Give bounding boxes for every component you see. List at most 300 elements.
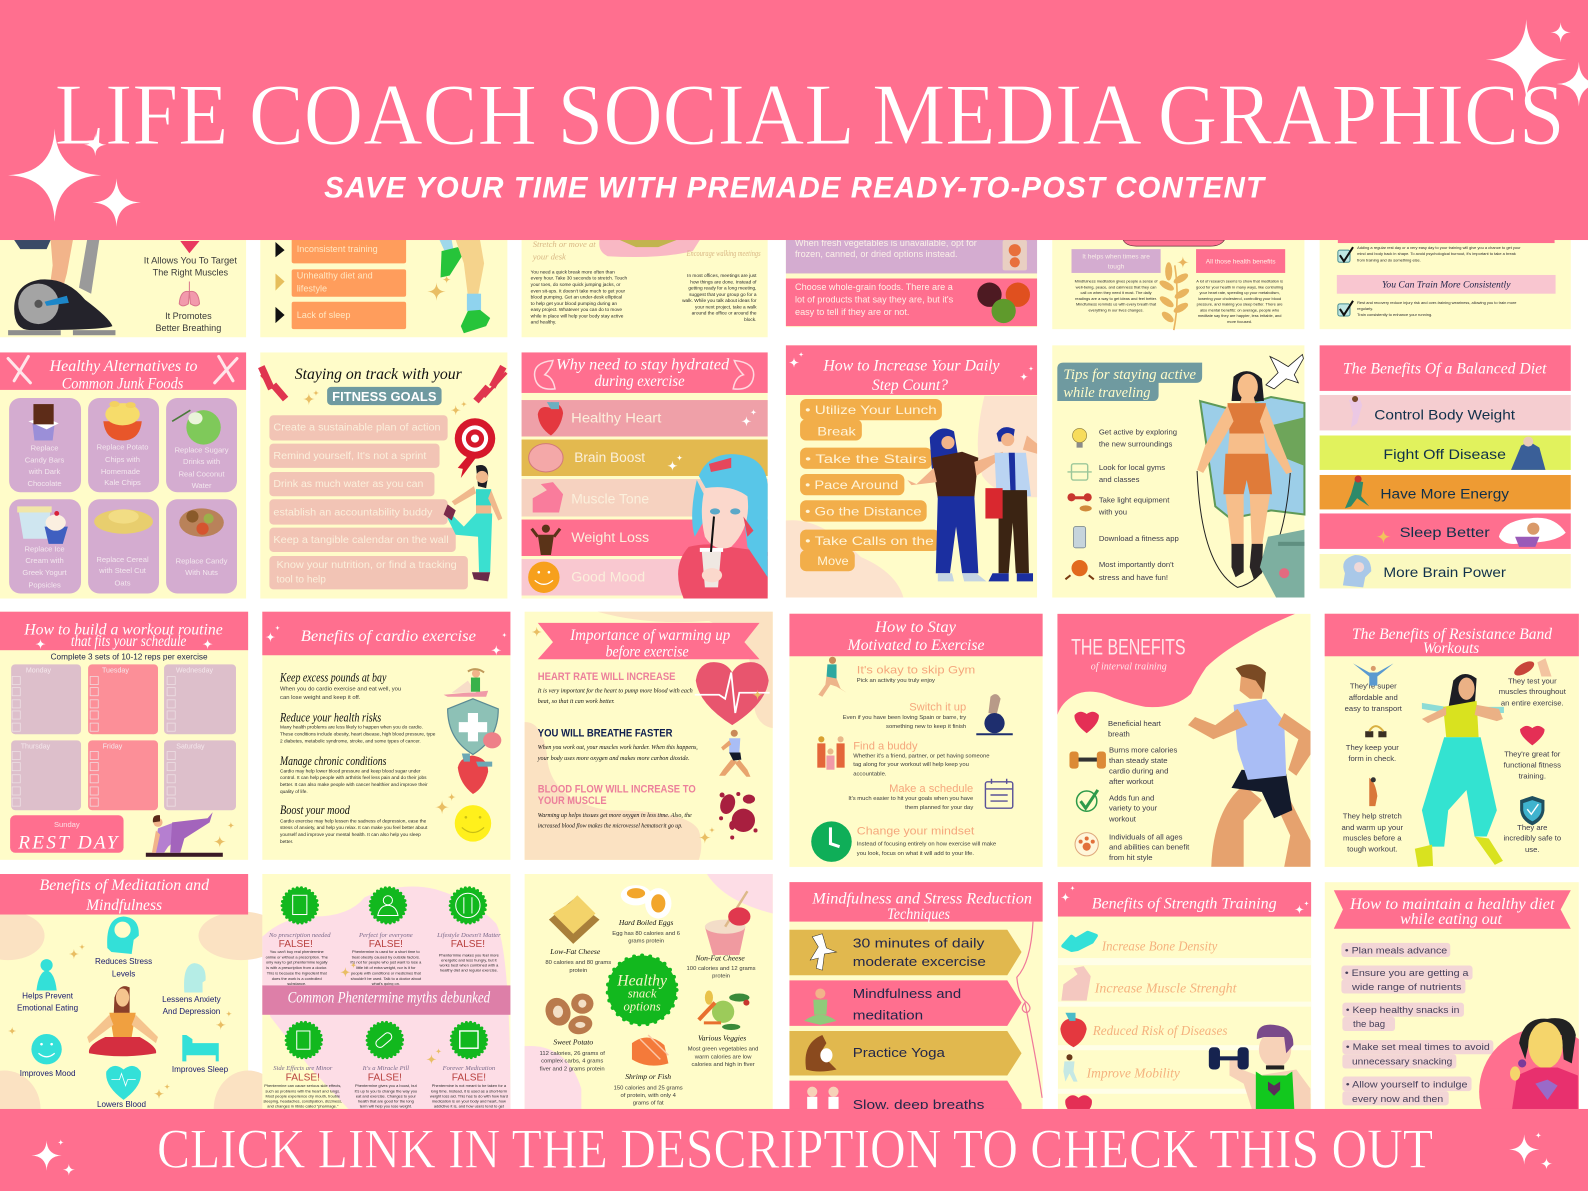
- text: left paragraph: to help get your blood pumping during an: [531, 301, 617, 307]
- myth: lifestyle: [436, 932, 501, 973]
- card labels: with Dark: [28, 467, 61, 476]
- header: workout routine: [0, 612, 248, 650]
- myth: forever medication: [430, 1065, 508, 1108]
- item: keep excess pounds: can lose weight and keep it off.: [280, 695, 361, 701]
- header: motivated: [789, 614, 1043, 656]
- list: eating tips: • Allow yourself to indulge: [1346, 1079, 1467, 1090]
- bottom banner: [0, 1109, 1588, 1191]
- icon: coconut: [172, 410, 221, 445]
- header: resistance band: Workouts: [1423, 639, 1479, 657]
- weekday cards: Saturday: [176, 742, 205, 750]
- item: switch it up: [843, 701, 966, 730]
- list: travel tips: [1098, 427, 1179, 582]
- bar: brain boost: [522, 440, 768, 476]
- item: improves sleep: [172, 1035, 229, 1074]
- item: keep excess pounds: [279, 671, 401, 701]
- myth: no prescription: This is because the ingredient that: [267, 970, 328, 975]
- panel: phentermine myths: [262, 874, 510, 1117]
- panel: fitness goals: [260, 352, 507, 599]
- bar: weight loss: Weight Loss: [571, 530, 649, 546]
- icon: stretching man: [1353, 663, 1394, 686]
- text: right paragraph: around the office or around the: [692, 311, 757, 317]
- text: left benefits: They help stretch: [1343, 812, 1402, 821]
- panel: healthy alternatives: [0, 352, 246, 599]
- icon: phone: [1074, 527, 1086, 548]
- bar: weight loss: [522, 520, 768, 556]
- item: emotional eating: [17, 959, 78, 1013]
- item: breathe faster: your body uses more oxygen and makes more carbon dioxide.: [537, 755, 690, 762]
- icon: woman in pink circle: [1479, 1018, 1579, 1109]
- text: right benefits: muscles throughout: [1499, 687, 1567, 696]
- myth: side effects: Most people experience dry mouth, trouble: [265, 1093, 341, 1098]
- header: balanced diet: [1320, 345, 1571, 391]
- item: improves mood: [20, 1034, 75, 1078]
- item labels: veggies: calories and high in fiver: [692, 1062, 755, 1068]
- icon: anime girl with drink: [678, 454, 768, 599]
- list: travel tips: Look for local gyms: [1099, 463, 1165, 472]
- card labels: Replace Candy: [176, 557, 228, 566]
- icon: heart with arms: [1520, 726, 1545, 745]
- list: travel tips: stress and have fun!: [1099, 573, 1168, 582]
- list: causes bars: lifestyle: [297, 284, 327, 294]
- item labels: potato: Sweet Potato: [553, 1038, 593, 1047]
- text: right benefits: use.: [1525, 845, 1540, 854]
- card labels: Oats: [115, 578, 131, 587]
- icon: sparkles: [532, 627, 763, 844]
- label box: health benefits: [1196, 249, 1285, 273]
- bar: more brain power: More Brain Power: [1383, 565, 1506, 581]
- card labels: Water: [192, 481, 212, 490]
- item: make a schedule: Make a schedule: [889, 783, 973, 795]
- subtitle: sets: Complete 3 sets of 10-12 reps per exercise: [51, 651, 208, 661]
- text: left benefits: affordable and: [1349, 693, 1398, 702]
- item labels: yogurt: [687, 954, 756, 980]
- myth: perfect for everyone: shouldn't be used. Talk to a doctor about: [351, 976, 422, 981]
- card labels: with Steel Cut: [98, 566, 147, 575]
- icon: shield: [448, 699, 501, 755]
- list: goal bars: establish an accountability buddy: [273, 507, 433, 518]
- item: change mindset: you look, focus on what it will add to your life.: [857, 851, 974, 857]
- text: left benefits: easy to transport: [1345, 704, 1403, 713]
- list: eating tips: unnecessary snacking: [1352, 1056, 1452, 1067]
- text: right paragraph: more focused.: [1227, 319, 1252, 324]
- item: blood flow: BLOOD FLOW WILL INCREASE TO: [538, 784, 696, 796]
- text: left paragraph: blood pumping. Get an under-desk elliptical: [531, 295, 622, 301]
- item labels: veggies: Various Veggies: [698, 1034, 746, 1043]
- row separators: [1058, 958, 1311, 1094]
- myth: miracle pill: eat and exercise. Changes to your: [356, 1093, 417, 1098]
- arrow: mindfulness: Mindfulness and: [853, 986, 961, 1001]
- checklist item: rest day: mind and body back in shape. To avoid psychological burnout, it's important to take a break: [1357, 251, 1516, 256]
- icon: woman with band: [1415, 674, 1504, 867]
- list: benefits: Burns more calories: [1109, 746, 1177, 755]
- text: left paragraph: every hour. Take 30 seconds to stretch. Touch: [531, 276, 628, 282]
- item: better heart: [1065, 1095, 1092, 1119]
- header: strength: [1058, 882, 1311, 917]
- arrow: mindfulness: meditation: [853, 1008, 923, 1023]
- item: improves sleep: Improves Sleep: [172, 1065, 229, 1074]
- item: improve mobility: Improve Mobility: [1086, 1066, 1180, 1081]
- card labels: [22, 443, 229, 589]
- icon: woman with jump rope: [1197, 371, 1292, 587]
- text: right paragraph: pressure, and making you sleep better. There are: [1197, 302, 1283, 307]
- panel: hydration: [522, 352, 768, 599]
- text: left paragraph: and healthy.: [531, 320, 556, 326]
- item: emotional eating: Emotional Eating: [17, 1004, 78, 1013]
- item: make a schedule: [848, 783, 973, 811]
- myth: forever medication: Forever Medication: [442, 1065, 496, 1072]
- item labels: eggs: [612, 918, 680, 945]
- item: skip gym: It's okay to skip Gym: [857, 664, 975, 676]
- list: eating tips: wide range of nutrients: [1351, 982, 1462, 993]
- text: right paragraph: suggest that your group go for a: [689, 292, 757, 298]
- myth: no prescription: FALSE!: [279, 939, 313, 950]
- item: change mindset: Change your mindset: [857, 826, 975, 838]
- icon: sparkles: [435, 793, 456, 814]
- item: boost your mood: yourself and improve your mental health. It can also help you sleep: [280, 832, 421, 838]
- myth: side effects: FALSE!: [286, 1073, 320, 1084]
- item labels: fish: [614, 1072, 683, 1107]
- heading: the benefits: [1072, 639, 1185, 672]
- text: right paragraph: also mental benefits: on average, people who: [1200, 307, 1280, 312]
- text: right paragraph: walk. While you talk about ideas for: [682, 298, 757, 304]
- item labels: fish: of protein, with only 4: [620, 1093, 677, 1099]
- item: keep excess pounds: When you do cardio exercise and eat well, you: [280, 687, 401, 693]
- band: train consistently: You Can Train More Consistently: [1382, 280, 1511, 291]
- header: cardio: [262, 612, 510, 655]
- header: meditation: Mindfulness: [85, 896, 162, 914]
- bar: more brain power: [1320, 554, 1571, 588]
- list: benefits: than steady state: [1109, 756, 1168, 765]
- header: meditation: [0, 874, 248, 915]
- text: right benefits: They are: [1517, 823, 1547, 832]
- icon: smiley: [455, 805, 491, 842]
- icon: yoga figure: [146, 812, 223, 857]
- list: goal bars: Create a sustainable plan of action: [273, 422, 441, 433]
- list: travel tips: Most importantly don't: [1099, 560, 1175, 569]
- text: left paragraph: call on when they need it most. The daily: [1081, 290, 1152, 295]
- bar: good mood: [522, 559, 768, 596]
- item: reduce health risks: 2 diabetes, metabolic syndrome, stroke, and some types of cancer.: [280, 739, 421, 745]
- item labels: eggs: Hard Boiled Eggs: [618, 918, 673, 927]
- item: manage chronic conditions: quality of life.: [280, 789, 308, 795]
- panel: healthy food tips fragment: [786, 233, 1037, 327]
- icon: potato chips: [103, 401, 142, 441]
- text: right paragraph: [682, 273, 757, 323]
- icon: map: [1200, 397, 1304, 519]
- ribbon heading: eating out: How to maintain a healthy diet: [1349, 895, 1555, 913]
- item: bone density: Increase Bone Density: [1101, 938, 1217, 953]
- tip box: whole grain: easy to tell if they are or not.: [795, 307, 909, 317]
- item labels: fish: 150 calories and 25 grams: [614, 1085, 683, 1091]
- myth: perfect for everyone: It's not for people who just want to lose a: [350, 960, 422, 965]
- text: left paragraph: your toes, do some quick jumping jacks, or: [531, 282, 621, 288]
- list: step tips: • Take Calls on the: [805, 534, 934, 548]
- icon: luggage: [1260, 530, 1304, 598]
- item labels: potato: [540, 1038, 605, 1072]
- tip box: whole grain: lot of products that say they are, but it's: [795, 294, 954, 304]
- panel: desk stretch tips fragment: [522, 233, 768, 337]
- bar: have more energy: Have More Energy: [1380, 486, 1510, 502]
- item: lowers blood pressure: Lowers Blood: [97, 1100, 146, 1109]
- myth: miracle pill: it's up to you to change the way you: [355, 1088, 417, 1093]
- myth: perfect for everyone: treat obesity caused by outside factors.: [352, 954, 420, 959]
- text: right benefits: [1499, 676, 1567, 854]
- item labels: eggs: Egg has 80 calories and 6: [612, 931, 680, 937]
- item: find a buddy: tag along for your workout will help keep you: [853, 762, 969, 768]
- myth: no prescription: online or without a prescription. The: [266, 954, 329, 959]
- panel: balanced diet: [1320, 345, 1571, 589]
- myth: perfect for everyone: Perfect for everyone: [358, 932, 413, 939]
- bar: control body weight: Control Body Weight: [1374, 407, 1515, 423]
- list: travel tips: the new surroundings: [1099, 440, 1172, 449]
- myth: forever medication: long time. Instead, it is used as a short-term: [431, 1088, 508, 1093]
- panel: benefits of cardio: [262, 612, 510, 860]
- item: skip gym: [857, 664, 975, 684]
- tip box: frozen vegetables: When fresh vegetables is unavailable, opt for: [795, 238, 977, 248]
- panel: bike benefits fragment: [0, 233, 246, 337]
- top banner: [0, 0, 1588, 240]
- subtitle: SAVE YOUR TIME WITH PREMADE READY-TO-POST CONTENT: [324, 171, 1266, 204]
- icon: figure stretching: [1369, 777, 1377, 806]
- item: boost your mood: Boost your mood: [280, 803, 351, 817]
- list: causes bars: Unhealthy diet and: [297, 271, 373, 281]
- icon: arm and muscle: [1512, 658, 1552, 678]
- item: find a buddy: Whether it's a friend, partner, or pet having someone: [853, 754, 990, 760]
- myth: no prescription: substance.: [287, 981, 306, 986]
- myth: side effects: [263, 1065, 342, 1108]
- icon: cutlery right: [215, 356, 237, 383]
- text: right paragraph: your heart rate, speeding up your metabolism,: [1199, 290, 1280, 295]
- badge: healthy snack options: options: [623, 1000, 661, 1014]
- header: hydration: [522, 352, 768, 393]
- checklist item: train consistently: Rest and recovery reduce injury risk and over-training weariness, allowing you to train more: [1357, 300, 1517, 305]
- bar: sleep better: [1320, 513, 1571, 549]
- item: switch it up: something new to keep it finish: [886, 724, 966, 730]
- bar: good mood: Good Mood: [571, 569, 645, 585]
- card labels: Replace Potato: [97, 443, 148, 452]
- icon: plane: [1266, 354, 1303, 389]
- icon: heart: [180, 241, 200, 253]
- icon: dumbbell: [1067, 493, 1092, 511]
- text: right benefits: an entire exercise.: [1501, 698, 1564, 707]
- heading: fitness goals: Staying on track with your: [295, 365, 462, 383]
- heading: the benefits: THE BENEFITS: [1071, 635, 1186, 660]
- icon: yogurt and ice cream: [17, 506, 68, 544]
- bar: have more energy: [1320, 475, 1571, 509]
- tip box: whole grain: [786, 279, 1037, 326]
- list: goal bars: Drink as much water as you can: [273, 479, 423, 490]
- header: healthy alternatives: Healthy Alternatives to: [49, 357, 197, 375]
- bar: healthy heart: [522, 400, 768, 436]
- panel: warming up: [525, 612, 773, 860]
- myth: no prescription: only way to get phentermine legally: [266, 960, 328, 965]
- item: improve mobility: [1063, 1054, 1180, 1082]
- text: left paragraph: while in place will help your body stay active: [531, 313, 624, 319]
- item: switch it up: Switch it up: [909, 701, 966, 713]
- item labels: yogurt: Non-Fat Cheese: [694, 954, 745, 963]
- text: right paragraph: A lot of research seems to show that meditation is: [1196, 279, 1283, 284]
- arrow: daily exercise: [789, 930, 1022, 975]
- myth: miracle pill: [355, 1065, 418, 1108]
- icon: meditating woman: [87, 986, 158, 1056]
- decorative blobs: [525, 612, 773, 860]
- item: blood flow: YOUR MUSCLE: [538, 795, 607, 807]
- myth: miracle pill: term will help you lose weight.: [360, 1103, 412, 1108]
- tip box: frozen vegetables: [786, 233, 1037, 273]
- weekday cards: Friday: [103, 742, 123, 750]
- list: travel tips: Get active by exploring: [1099, 427, 1177, 436]
- myth: no prescription: is with a prescription from a doctor.: [266, 965, 327, 970]
- icon: friends: [817, 736, 845, 770]
- icon: light bulb: [1073, 428, 1087, 448]
- list: travel tips: Download a fitness app: [1099, 534, 1179, 543]
- item: manage chronic conditions: control. It can help people with arthritis feel less pain and do their jobs: [280, 775, 427, 781]
- icon: left sparkles: [31, 1139, 75, 1176]
- text: left benefits: form in check.: [1348, 754, 1396, 763]
- item: heart rate: HEART RATE WILL INCREASE: [538, 671, 676, 683]
- bar: brain boost: Brain Boost: [574, 450, 645, 466]
- item: muscle strength: Increase Muscle Strenght: [1094, 980, 1237, 995]
- item: manage chronic conditions: better. It can also make people with cancer healthier and improve their: [280, 782, 428, 788]
- card: rest day: [10, 815, 124, 854]
- panel: resistance band: [1325, 614, 1579, 867]
- text: right benefits: training.: [1519, 772, 1546, 781]
- myth: perfect for everyone: people with conditions or medicines that: [351, 970, 422, 975]
- text: benefits: It Allows You To Target: [144, 255, 237, 265]
- tip box: whole grain: Choose whole-grain foods. There are a: [795, 282, 954, 292]
- icon: runner: [818, 657, 847, 697]
- myth: no prescription: No prescription needed: [268, 932, 331, 939]
- icon: dumbbell: [1069, 751, 1106, 769]
- card labels: Drinks with: [183, 457, 220, 466]
- text: benefits: It Promotes: [165, 311, 212, 321]
- icon: sparkles: [340, 962, 442, 1064]
- icon: man with folder: [985, 427, 1037, 581]
- item: breathe faster: YOU WILL BREATHE FASTER: [538, 727, 673, 739]
- icon: chocolate: [28, 404, 59, 441]
- band: myths debunked: Common Phentermine myths debunked: [288, 989, 491, 1007]
- item: reduced risk: Reduced Risk of Diseases: [1092, 1023, 1227, 1038]
- icon: yogurt cup: [705, 891, 750, 955]
- badge: healthy snack options: Healthy: [616, 972, 667, 989]
- myth: perfect for everyone: Phentermine is used for a short time to: [352, 949, 420, 954]
- item: reduces stress: Reduces Stress: [95, 957, 152, 966]
- header: step count: [786, 345, 1037, 395]
- list: causes bars: [275, 233, 406, 329]
- text: left paragraph: Mindfulness reminds us with every breath that: [1076, 302, 1157, 307]
- item labels: potato: fiver and 2 grams protein: [540, 1066, 605, 1072]
- item labels: cheese: protein: [569, 968, 587, 974]
- text: right paragraph: your next project, take a walk: [695, 304, 757, 310]
- list: step tips: Break: [817, 424, 857, 438]
- icon: salad plate: [599, 240, 700, 257]
- badge row: bottom: [286, 1022, 487, 1058]
- item labels: yogurt: protein: [712, 974, 730, 980]
- item labels: eggs: grams protein: [628, 939, 664, 945]
- text: benefits: The Right Muscles: [153, 267, 229, 277]
- text: right paragraph: how things are done. Instead of: [690, 279, 757, 285]
- item labels: veggies: warm calories are low: [694, 1054, 752, 1060]
- item labels: cheese: [545, 947, 611, 974]
- arrow: practice yoga: Practice Yoga: [853, 1045, 946, 1060]
- item labels: veggies: [688, 1034, 758, 1068]
- badge: healthy snack options: snack: [628, 987, 657, 1001]
- arrow: slow breaths: [789, 1081, 1022, 1124]
- band: train consistently: [1337, 275, 1556, 294]
- list: benefits: after workout: [1109, 777, 1154, 786]
- icon: gold sparkle: [427, 275, 451, 301]
- decorative pink shape: [1057, 614, 1295, 715]
- header: workout routine: How to build a workout routine: [23, 620, 223, 638]
- header: motivated: Motivated to Exercise: [847, 636, 984, 654]
- call to action: CLICK LINK IN THE DESCRIPTION TO CHECK THIS OUT: [157, 1119, 1433, 1181]
- text: right paragraph: [1196, 279, 1283, 324]
- text: right paragraph: In most offices, meetings are just: [687, 273, 757, 279]
- icon: target: [455, 418, 495, 478]
- item: emotional eating: Helps Prevent: [22, 992, 74, 1001]
- myth: lifestyle: Phentermine makes you feel more: [439, 953, 500, 958]
- ribbon heading: warming up: before exercise: [606, 642, 689, 660]
- panel: healthy diet while eating out: [1324, 882, 1579, 1109]
- item: reduce health risks: Many health problems are less likely to happen when you do cardio.: [280, 725, 423, 731]
- heading: stretch: [532, 239, 596, 261]
- list: goal bars: tool to help: [276, 574, 326, 585]
- myth: side effects: and changes in libido called "pharmage.": [267, 1103, 339, 1108]
- badge: healthy snack options: [608, 956, 677, 1024]
- text: left paragraph: You need a quick break more often than: [531, 269, 615, 275]
- label box: health benefits: All those health benefits: [1206, 258, 1276, 265]
- header: step count: Step Count?: [872, 376, 948, 394]
- weekday cards: Monday: [26, 666, 52, 674]
- myth: miracle pill: It's a Miracle Pill: [362, 1065, 409, 1072]
- list: eating tips: • Keep healthy snacks in: [1346, 1005, 1459, 1016]
- myth: forever medication: weight loss aid. This has to do with how hard: [430, 1093, 508, 1098]
- text: left paragraph: easy project. Whatever you can do to move: [531, 307, 622, 313]
- list: benefits: Adds fun and: [1109, 793, 1154, 802]
- bar: muscle tone: Muscle Tone: [571, 491, 649, 507]
- icon: right sparkles: [1509, 1132, 1553, 1170]
- item: lessens anxiety: Lessens Anxiety: [162, 995, 222, 1004]
- icon: woman talking: [907, 428, 1005, 581]
- checklist item: rest day: [1338, 239, 1555, 262]
- header: healthy alternatives: [0, 352, 246, 392]
- card labels: Cream with: [25, 556, 64, 565]
- icon: heart with muscles: [1074, 712, 1099, 733]
- header: motivated: How to Stay: [874, 618, 957, 636]
- list: goal bars: [269, 415, 468, 589]
- list: travel tips: with you: [1098, 507, 1127, 516]
- tip box: frozen vegetables: frozen, canned, or dried options instead.: [795, 249, 958, 259]
- bar: control body weight: [1320, 395, 1571, 430]
- bar: healthy heart: Healthy Heart: [571, 410, 661, 426]
- heading: tips box: [1057, 363, 1202, 401]
- icon: cheese: [549, 895, 600, 944]
- list: step tips: • Utilize Your Lunch: [805, 403, 937, 417]
- icon: vegetables: [699, 990, 749, 1030]
- icon: sparkles: [8, 944, 232, 1099]
- card labels: Homemade: [101, 467, 140, 476]
- item labels: cheese: Low-Fat Cheese: [549, 947, 601, 956]
- panel: daily step count: [786, 345, 1037, 598]
- myth: lifestyle: Lifestyle Doesn't Matter: [436, 932, 501, 939]
- header: step count: How to Increase Your Daily: [822, 357, 1000, 375]
- panel: strength training: [1058, 882, 1311, 1119]
- icon: running legs: [440, 240, 490, 333]
- header: workout routine: that fits your schedule: [71, 632, 186, 650]
- item: breathe faster: When you work out, your muscles work harder. When this happens,: [538, 744, 698, 751]
- bar: fight off disease: [1320, 435, 1571, 470]
